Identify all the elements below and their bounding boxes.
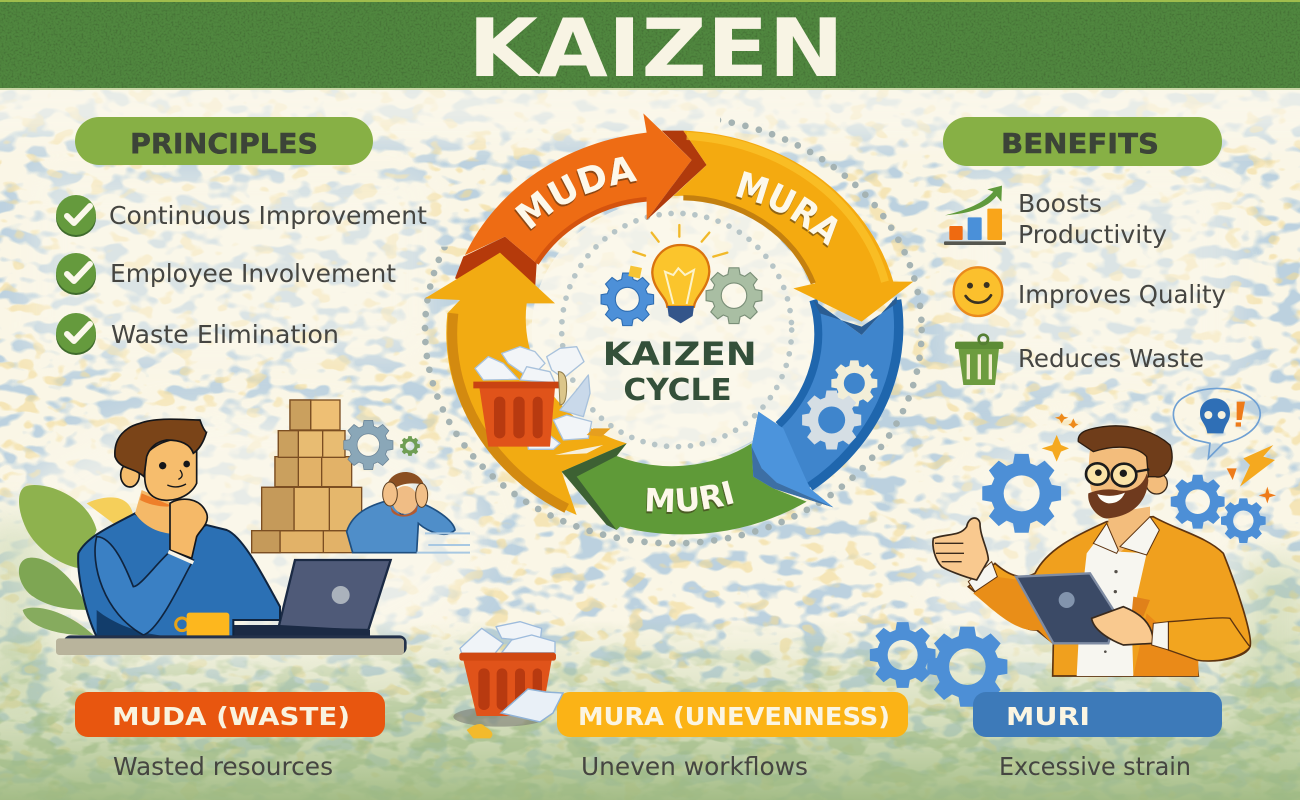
benefit: improves quality: Improves Quality [1018,280,1226,309]
benefit icons [944,186,1006,385]
caption: muda: Wasted resources [113,752,333,781]
benefit: boosts productivity: Boosts [1018,189,1102,218]
sparkles and lightning [1042,413,1276,503]
inner dotted ring [562,213,792,447]
panel: mura (unevenness) [501,689,908,781]
icon: overflowing waste basket in cycle [473,347,611,455]
icon: green bin [955,335,1003,385]
icon: bar chart [944,186,1006,245]
principle: continuous improvement: Continuous Improvement [109,201,427,230]
seated man [78,419,280,637]
center label: kaizen cycle: CYCLE [623,373,732,408]
arrow: mura yellow [674,130,914,322]
principle: waste elimination [56,313,339,355]
crumpled paper over pill [501,689,563,722]
stressed worker [347,472,470,553]
icon: light bulb [628,225,727,323]
label: muda: MUDA [514,156,638,231]
coffee cup [176,613,229,637]
benefit: reduces waste: Reduces Waste [1018,344,1204,373]
arrow: muri green [562,443,806,534]
arrow: muda orange [455,114,706,286]
illustration: thoughtful man at laptop with box pile [19,400,470,655]
arrow: yellow return [425,253,627,515]
benefit: boosts productivity: Productivity [1018,220,1167,249]
principle: waste elimination: Waste Elimination [111,320,339,349]
icon: small green cog [400,436,420,456]
inner pale disc [532,198,818,462]
title text: KAIZEN [468,2,844,95]
principle: employee involvement [56,253,396,295]
center label: kaizen cycle: KAIZEN [603,335,757,373]
icon: grey cog [706,268,762,324]
caption: mura: Uneven workflows [581,752,808,781]
manager body [933,507,1250,676]
outer dotted ring [425,117,922,543]
principle: continuous improvement [56,195,427,237]
icon: small cog on arrow [831,360,877,406]
arrow: muri blue [752,297,899,507]
principles heading: PRINCIPLES [130,127,318,160]
icon: smiley [954,267,1002,316]
benefits heading: BENEFITS [1001,127,1159,160]
label: muri: MURI [646,480,734,514]
benefits heading [943,117,1222,166]
caption: muri: Excessive strain [999,752,1191,781]
panel: principles [56,117,427,355]
label: mura: MURA [736,171,838,248]
tablet [1016,573,1168,650]
manager head [1078,426,1172,518]
principles heading [75,117,373,165]
illustration: bearded manager with tablet [870,388,1276,707]
panel: muri: MURI [1006,702,1090,731]
desk [56,635,407,655]
panel: muri [973,692,1222,781]
title banner [0,0,1300,95]
cog cluster [870,454,1266,707]
center label: kaizen cycle [603,335,757,408]
leaves [19,485,133,635]
panel: muda (waste): MUDA (WASTE) [112,702,350,731]
icon: grey-blue cog [344,420,393,470]
kaizen cycle diagram [422,114,925,547]
benefit: boosts productivity [1018,189,1167,249]
icon: large cog on arrow [802,390,861,450]
panel: benefits [943,117,1226,385]
panel: muda (waste) [75,692,385,781]
icon: blue cog [601,273,654,326]
speech bubble with skull [1173,388,1260,458]
icon: waste basket at bottom [453,622,556,738]
box pile [252,400,362,553]
principle: employee involvement: Employee Involvement [110,259,396,288]
panel: mura (unevenness): MURA (UNEVENNESS) [578,702,890,731]
laptop [232,560,391,637]
